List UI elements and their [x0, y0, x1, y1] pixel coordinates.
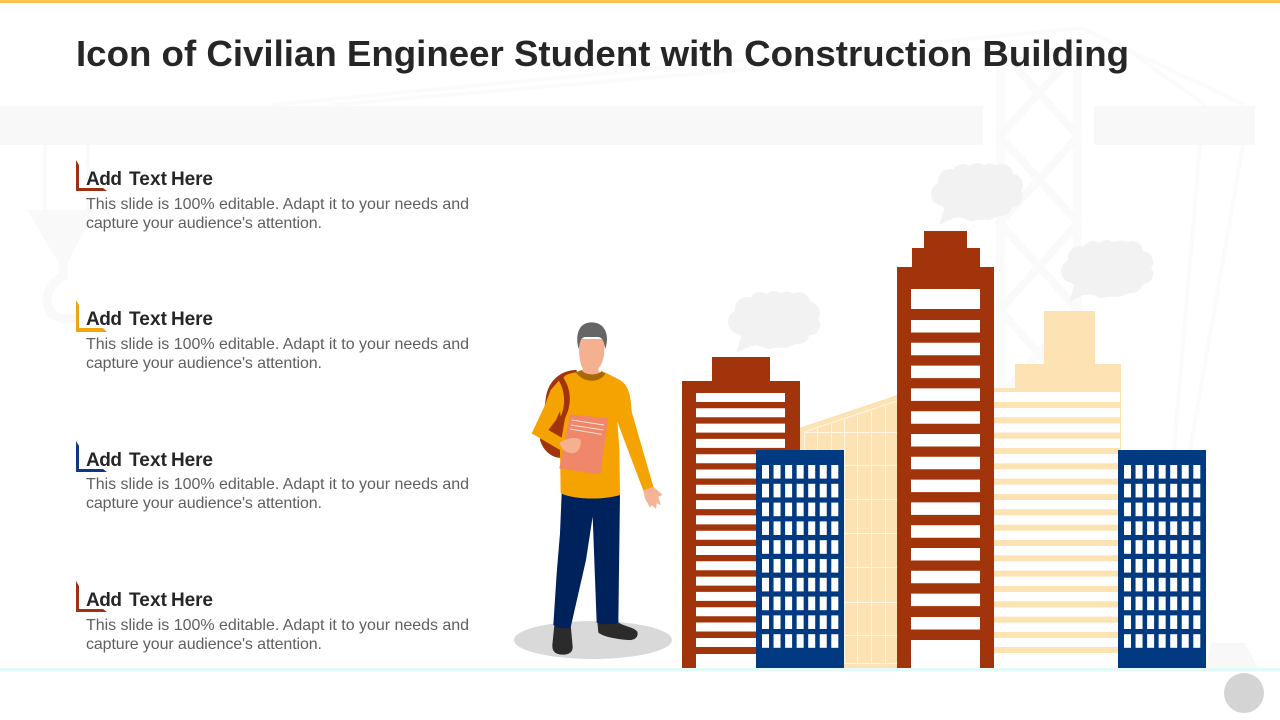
page number circle — [1224, 673, 1264, 713]
body 3: capture your audience's attention. — [86, 495, 322, 512]
right shoe — [597, 622, 638, 640]
title: Icon of Civilian Engineer Student with Construction Building — [76, 33, 1129, 74]
body 4: This slide is 100% editable. Adapt it to your needs and — [86, 617, 469, 634]
top accent bar — [0, 0, 1280, 3]
heading 4: Text — [129, 590, 168, 611]
heading 4: Here — [171, 590, 213, 611]
sweater collar — [576, 370, 605, 381]
backpack strap — [547, 370, 577, 438]
body 2: capture your audience's attention. — [86, 355, 322, 372]
building: blue tower right — [1118, 450, 1206, 668]
left hand — [559, 438, 581, 453]
neck and face — [579, 339, 605, 377]
book lines — [570, 420, 604, 434]
accent corner 1 — [76, 160, 107, 191]
accent corner 4 — [76, 581, 107, 612]
heading 2: Add — [86, 309, 122, 330]
building: peach striped tower — [994, 311, 1121, 668]
body 2: This slide is 100% editable. Adapt it to your needs and — [86, 336, 469, 353]
text block 3 — [76, 441, 469, 512]
book — [559, 414, 608, 474]
body 3: This slide is 100% editable. Adapt it to your needs and — [86, 476, 469, 493]
building: blue tower left — [756, 450, 844, 668]
smoke cloud 2 — [931, 163, 1023, 225]
sweater — [532, 372, 653, 499]
heading 1: Add — [86, 169, 122, 190]
body 1: capture your audience's attention. — [86, 215, 322, 232]
upper body — [532, 322, 663, 509]
trousers — [553, 493, 620, 628]
accent corner 3 — [76, 441, 107, 472]
heading 4: Add — [86, 590, 122, 611]
text block 4 — [76, 581, 469, 653]
building: red tower left — [682, 357, 800, 668]
ground line — [0, 668, 1280, 672]
smoke cloud 3 — [1061, 240, 1153, 302]
heading 3: Here — [171, 450, 213, 471]
backpack — [540, 370, 577, 458]
heading 2: Here — [171, 309, 213, 330]
body 1: This slide is 100% editable. Adapt it to your needs and — [86, 196, 469, 213]
body 4: capture your audience's attention. — [86, 636, 322, 653]
text block 2 — [76, 300, 469, 372]
text block 1 — [76, 160, 469, 232]
accent corner 2 — [76, 300, 107, 332]
lower body — [514, 493, 672, 659]
heading 3: Add — [86, 450, 122, 471]
left shoe — [552, 625, 573, 655]
ground shadow — [514, 621, 672, 659]
heading 2: Text — [129, 309, 168, 330]
building: red tower tall — [897, 231, 994, 668]
building: peach grid tower — [799, 395, 897, 668]
heading 1: Here — [171, 169, 213, 190]
student figure — [514, 322, 672, 659]
smoke cloud 1 — [728, 291, 820, 353]
hair — [577, 322, 607, 349]
heading 1: Text — [129, 169, 168, 190]
right hand — [643, 487, 663, 509]
heading 3: Text — [129, 450, 168, 471]
